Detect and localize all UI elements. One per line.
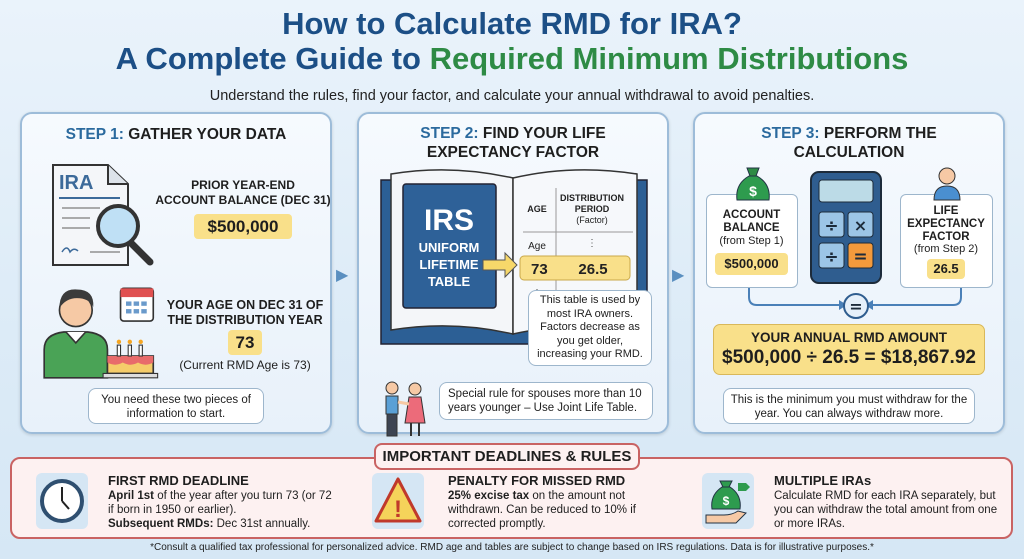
item: penalty: PENALTY FOR MISSED RMD xyxy=(448,473,625,488)
heading: step 1: STEP 1: GATHER YOUR DATA xyxy=(66,126,286,143)
icon: money bag: $ xyxy=(749,183,757,199)
item: multiple IRAs: Calculate RMD for each IRA separately, but you can withdraw the total amount from one or more IRAs. xyxy=(774,490,997,530)
box: account balance: $500,000 xyxy=(724,256,779,271)
icon: calculator xyxy=(810,171,882,284)
panel: deadlines & rules xyxy=(10,457,1013,539)
item: multiple IRAs xyxy=(702,473,997,530)
icon: IRS uniform lifetime table book: PERIOD xyxy=(575,204,610,214)
item: first RMD deadline: April 1st of the year after you turn 73 (or 72 if born in 1950 or earlier). xyxy=(108,490,332,516)
item: first RMD deadline: Subsequent RMDs: Dec 31st annually. xyxy=(108,518,310,530)
icon: IRS uniform lifetime table book: LIFETIME xyxy=(419,257,479,272)
value: 500000: $500,000 xyxy=(208,217,278,236)
label: account balance: PRIOR YEAR-END xyxy=(191,178,295,192)
callout: minimum note xyxy=(723,388,975,424)
box: life expectancy factor: LIFE xyxy=(934,205,958,217)
connector: to equals: = xyxy=(849,297,863,316)
title xyxy=(116,6,908,76)
icon: calculator: ÷ xyxy=(824,216,839,236)
icon: IRS uniform lifetime table book: UNIFORM xyxy=(419,240,479,255)
connector: to equals xyxy=(748,288,962,319)
callout: table note: This table is used by most IRA owners. Factors decrease as you get older, increasing your RMD. xyxy=(537,294,643,360)
callout: minimum note: This is the minimum you must withdraw for the year. You can always withdraw more. xyxy=(731,394,967,420)
label: account balance: ACCOUNT BALANCE (DEC 31) xyxy=(155,193,331,207)
value: 500000 xyxy=(194,214,292,239)
item: penalty xyxy=(372,473,636,530)
icon: IRS uniform lifetime table book xyxy=(380,169,648,345)
icon: IRS uniform lifetime table book: AGE xyxy=(527,204,547,214)
box: life expectancy factor: 26.5 xyxy=(933,261,959,276)
value: 73: 73 xyxy=(236,333,254,352)
heading: step 2 xyxy=(420,125,606,161)
icon: calculator: ÷ xyxy=(824,247,839,267)
arrow: step1 to step2: ▶ xyxy=(336,267,348,284)
icon: IRS uniform lifetime table book: Age xyxy=(528,241,546,252)
heading: step 3 xyxy=(761,125,937,161)
callout: need two pieces: You need these two pieces of information to start. xyxy=(101,394,251,420)
value: 73 xyxy=(228,330,262,355)
item: first RMD deadline: FIRST RMD DEADLINE xyxy=(108,473,249,488)
icon: money bag xyxy=(736,168,770,200)
label: age xyxy=(167,298,323,327)
icon: clock xyxy=(36,473,88,529)
icon: person xyxy=(934,168,960,200)
item: first RMD deadline xyxy=(36,473,332,530)
icon: warning: ! xyxy=(394,496,402,523)
icon: couple xyxy=(386,382,426,436)
box: account balance: BALANCE xyxy=(723,222,780,234)
icon: IRS uniform lifetime table book: ⋮ xyxy=(587,238,597,249)
box: life expectancy factor: EXPECTANCY xyxy=(907,218,985,230)
label: account balance xyxy=(155,178,331,207)
box: life expectancy factor: FACTOR xyxy=(922,231,970,243)
icon: IRS uniform lifetime table book: 26.5 xyxy=(578,261,608,278)
footer disclaimer: *Consult a qualified tax professional for personalized advice. RMD age and tables are subject to change based on IRS regulations. Data is for illustrative purposes.* xyxy=(150,542,874,553)
box: account balance xyxy=(706,194,798,288)
icon: IRS uniform lifetime table book: ⋮ xyxy=(532,288,542,299)
icon: money in hand xyxy=(702,473,754,529)
heading: step 3: CALCULATION xyxy=(794,144,904,161)
callout: spouse rule: Special rule for spouses more than 10 years younger – Use Joint Life Table. xyxy=(448,388,642,414)
result: annual RMD amount: $500,000 ÷ 26.5 = $18,867.92 xyxy=(722,347,976,368)
item: penalty: 25% excise tax on the amount not withdrawn. Can be reduced to 10% if corrected promptly. xyxy=(448,490,636,530)
heading: important deadlines: IMPORTANT DEADLINES & RULES xyxy=(383,448,631,465)
heading: step 2: EXPECTANCY FACTOR xyxy=(427,144,599,161)
box: life expectancy factor xyxy=(900,194,993,288)
icon: IRS uniform lifetime table book: 73 xyxy=(531,261,548,278)
box: life expectancy factor: (from Step 2) xyxy=(914,243,978,255)
panel: step 3 xyxy=(693,112,1005,434)
result: annual RMD amount: YOUR ANNUAL RMD AMOUNT xyxy=(751,330,947,345)
title: A Complete Guide to Required Minimum Distributions xyxy=(116,41,908,76)
callout: spouse rule xyxy=(439,382,653,420)
panel: step 1 xyxy=(20,112,332,434)
icon: IRS uniform lifetime table book: IRS xyxy=(424,204,474,237)
icon: IRS uniform lifetime table book: TABLE xyxy=(428,274,471,289)
icon: IRS uniform lifetime table book: DISTRIBUTION xyxy=(560,193,624,203)
icon: money in hand: $ xyxy=(723,494,730,508)
box: account balance: ACCOUNT xyxy=(723,209,780,221)
icon: warning xyxy=(372,473,424,529)
icon: IRA document with magnifier: IRA xyxy=(59,172,93,194)
panel: step 2 xyxy=(357,112,669,434)
label: age: THE DISTRIBUTION YEAR xyxy=(167,313,323,327)
item: multiple IRAs: MULTIPLE IRAs xyxy=(774,473,871,488)
icon: IRS uniform lifetime table book: (Factor) xyxy=(576,215,608,225)
heading: step 3: STEP 3: PERFORM THE xyxy=(761,125,937,142)
result: annual RMD amount xyxy=(713,324,985,375)
heading: step 2: STEP 2: FIND YOUR LIFE xyxy=(420,125,606,142)
subtitle: Understand the rules, find your factor, and calculate your annual withdrawal to avoid penalties. xyxy=(210,88,814,104)
icon: person with calendar and cake xyxy=(43,288,158,379)
arrow: step2 to step3: ▶ xyxy=(672,267,684,284)
label: age: YOUR AGE ON DEC 31 OF xyxy=(167,298,323,312)
heading: important deadlines xyxy=(374,443,640,470)
icon: calculator: = xyxy=(853,247,868,267)
callout: need two pieces xyxy=(88,388,264,424)
title: How to Calculate RMD for IRA? xyxy=(282,6,742,41)
note: current RMD age: (Current RMD Age is 73) xyxy=(179,358,311,372)
box: account balance: (from Step 1) xyxy=(719,235,784,247)
icon: IRA document with magnifier xyxy=(52,164,154,266)
icon: calculator: × xyxy=(854,216,867,235)
